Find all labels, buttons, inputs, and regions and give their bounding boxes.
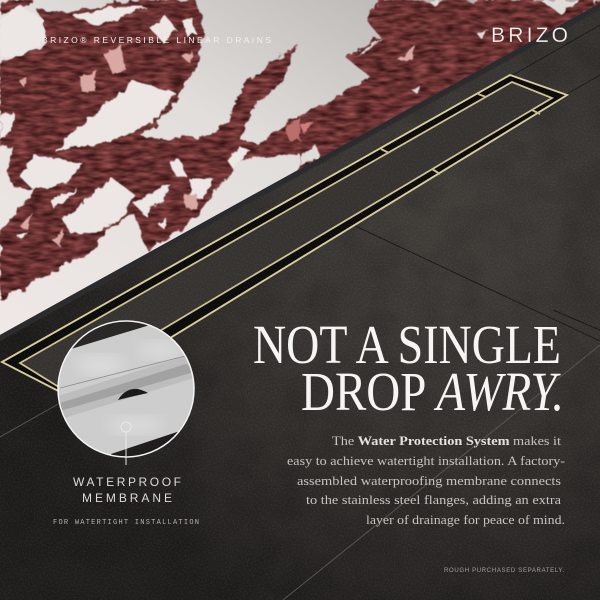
- stainless flange: [58, 356, 194, 420]
- headline: [253, 314, 564, 422]
- body copy: to the stainless steel flanges, adding an extra: [306, 492, 561, 507]
- body copy: layer of drainage for peace of mind.: [366, 512, 565, 527]
- dark floor showing above membrane: [72, 322, 148, 349]
- brand logo: BRIZO: [491, 24, 568, 47]
- callout subtitle: FOR WATERTIGHT INSTALLATION: [53, 519, 199, 527]
- linear drain frame: [2, 75, 567, 398]
- drain slot joints: [381, 94, 540, 174]
- header text: BRIZO® REVERSIBLE LINEAR DRAINS: [42, 35, 271, 45]
- marble wall: [0, 0, 600, 340]
- marble veins: [0, 0, 600, 300]
- body copy: assembled waterproofing membrane connects: [297, 473, 561, 488]
- pink marble flecks: [18, 43, 417, 245]
- wall base trim: [0, 3, 600, 341]
- white marble islands: [0, 0, 600, 240]
- callout title: WATERPROOF: [73, 475, 181, 489]
- body copy: easy to achieve watertight installation. A factory-: [287, 453, 565, 468]
- callout: waterproof membrane detail circle: [58, 321, 194, 465]
- body copy: The Water Protection System makes it: [332, 433, 561, 448]
- callout title: [73, 475, 181, 505]
- body copy: [287, 433, 565, 527]
- callout title: MEMBRANE: [82, 491, 172, 505]
- dark floor showing below membrane: [111, 432, 178, 456]
- headline: DROP AWRY.: [301, 361, 564, 422]
- weep hole: [118, 389, 148, 400]
- callout marker and leader line: [121, 422, 131, 465]
- footnote: ROUGH PURCHASED SEPARATELY.: [444, 568, 564, 574]
